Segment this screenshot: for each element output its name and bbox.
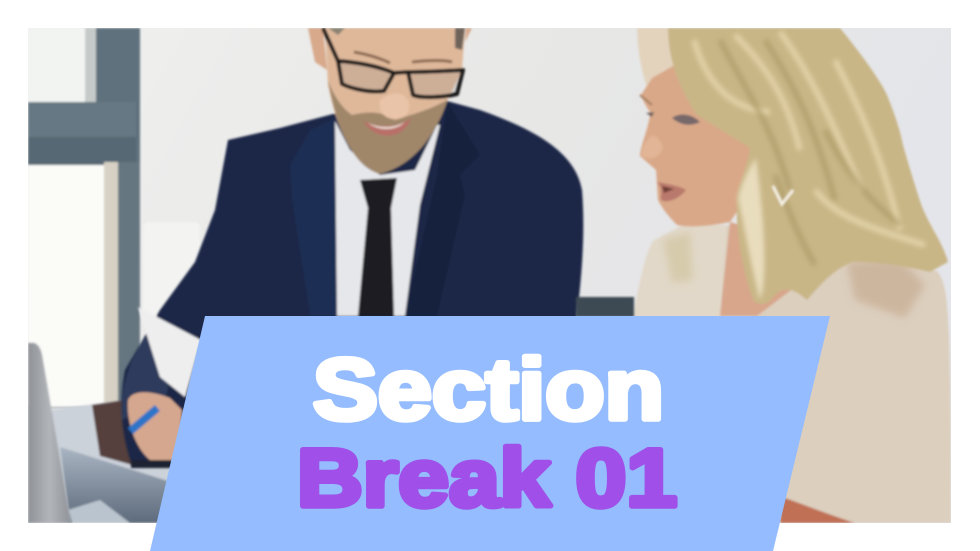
beard xyxy=(328,80,447,174)
blue banner xyxy=(150,316,830,551)
heading: Section: Section xyxy=(313,342,664,438)
hand at bottom xyxy=(780,497,855,523)
under-chin hair xyxy=(663,232,693,283)
hair xyxy=(668,28,948,304)
radiator xyxy=(143,222,200,322)
heading: Break 01: Break 01 xyxy=(297,433,677,524)
window xyxy=(28,28,140,408)
eye xyxy=(672,115,700,125)
nose xyxy=(380,93,409,119)
dark sofa edge xyxy=(576,297,634,317)
brows xyxy=(354,52,452,63)
neck and face xyxy=(324,28,466,136)
ears and hair xyxy=(308,28,327,70)
shirt xyxy=(335,121,440,316)
glasses xyxy=(323,28,463,97)
lace xyxy=(847,258,925,318)
mouth xyxy=(363,118,411,136)
laptop xyxy=(28,343,71,523)
man: suit xyxy=(121,28,583,468)
nose highlight xyxy=(642,136,662,158)
earring xyxy=(773,186,793,204)
desk xyxy=(51,400,169,523)
lips xyxy=(657,182,686,201)
woman xyxy=(633,28,951,523)
blouse xyxy=(720,224,951,523)
hand and paper xyxy=(138,307,201,397)
neck skin xyxy=(719,221,791,316)
forehead pale hair xyxy=(637,28,690,95)
face xyxy=(640,62,752,226)
tie xyxy=(358,178,397,316)
